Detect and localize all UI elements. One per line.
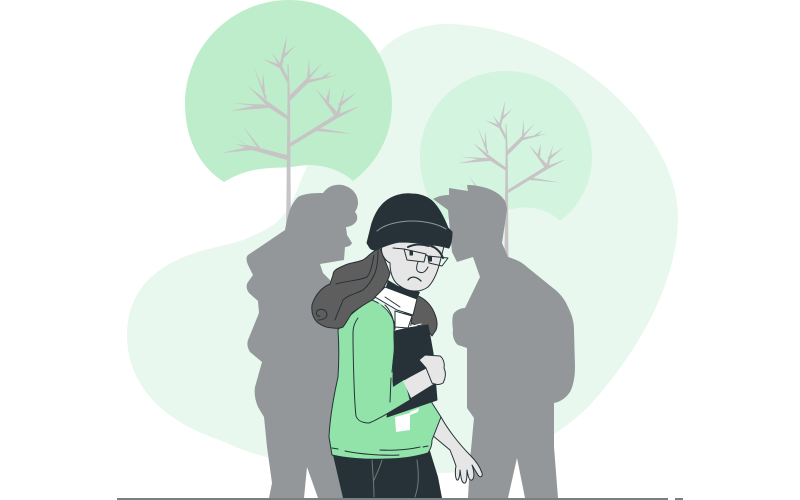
front hair [312, 248, 390, 328]
collar lower [395, 311, 412, 328]
left silhouette [246, 185, 358, 498]
glasses [393, 248, 448, 266]
white tag [395, 408, 419, 432]
sleeve [353, 303, 410, 423]
sweater [329, 300, 441, 459]
white shirt strip [395, 316, 412, 331]
collar fold [385, 297, 400, 307]
sleeve lines [353, 305, 410, 423]
right tree crown [420, 71, 592, 222]
background blob [127, 24, 678, 473]
hair strands [316, 250, 378, 320]
sweater hem lines [332, 446, 428, 455]
left tree crown [185, 0, 392, 182]
nose [417, 262, 428, 273]
left tree [222, 35, 360, 240]
girl [312, 194, 482, 498]
pants [333, 451, 442, 498]
beanie fold line [377, 221, 446, 231]
hand [419, 355, 445, 384]
back hair [400, 295, 437, 336]
beanie [367, 194, 452, 250]
pants seams [372, 460, 418, 497]
mouth [408, 277, 421, 281]
right tree [451, 100, 566, 262]
right arm [432, 417, 482, 483]
right silhouette [433, 185, 575, 498]
book page edge [395, 324, 421, 330]
forearm [403, 368, 435, 398]
forearm line [405, 368, 426, 379]
ground line [117, 498, 683, 500]
neck shadow [386, 280, 420, 299]
eyes [410, 251, 432, 261]
scarf collar [375, 287, 417, 315]
eyebrows [408, 245, 443, 258]
face [381, 236, 444, 291]
book [387, 325, 437, 417]
